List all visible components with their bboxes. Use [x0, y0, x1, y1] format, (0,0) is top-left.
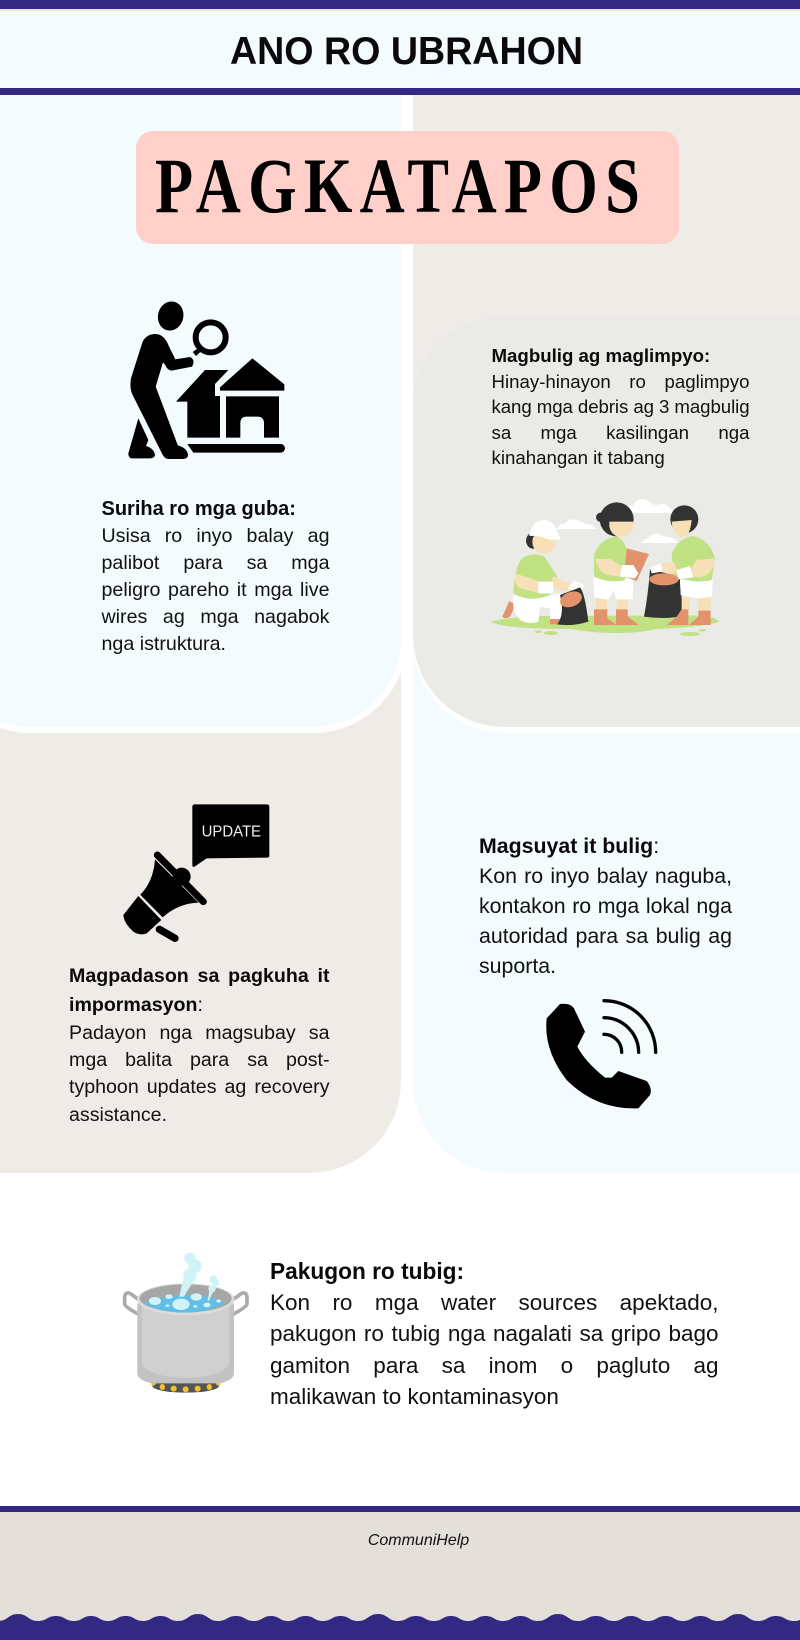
text: pakugon ro tubig: malikawan to kontaminasyon: [270, 1384, 559, 1409]
kneeling volunteer: [502, 520, 585, 624]
garbage bag left: [557, 587, 588, 625]
middle volunteer: [593, 502, 649, 625]
garbage bag right: [644, 569, 687, 618]
text: suriha ro mga guba: Suriha ro mga guba:: [102, 498, 296, 520]
text: magpadason sa pagkuha it impormasyon: typhoon updates ag recovery: [69, 1076, 330, 1098]
panel: right inner card: [413, 317, 800, 727]
text: pakugon ro tubig: Pakugon ro tubig:: [270, 1258, 464, 1284]
heading pill: pagkatapos: [136, 131, 679, 244]
text: magsuyat it bulig: suporta.: [479, 954, 556, 978]
rim and water: [137, 1283, 234, 1315]
icon: boiling pot on burner: [122, 1252, 249, 1393]
text: magpadason sa pagkuha it impormasyon: [69, 965, 330, 1126]
text: pakugon ro tubig: gamiton para sa inom o pagluto ag: [270, 1353, 718, 1378]
ground: [491, 615, 719, 636]
footer wave: [0, 1614, 800, 1640]
text: magbulig ag maglimpyo: kang mga debris ag 3 magbulig: [492, 396, 750, 417]
text: magbulig ag maglimpyo: sa mga kasilingan nga: [492, 422, 750, 443]
icon: megaphone with update bubble: [123, 804, 270, 942]
text: magsuyat it bulig: kontakon ro mga lokal nga: [479, 894, 732, 918]
text: magbulig ag maglimpyo: Magbulig ag maglimpyo:: [492, 345, 710, 366]
text: suriha ro mga guba: Usisa ro inyo balay ag: [102, 525, 330, 547]
bubbles and steam: [149, 1253, 221, 1310]
panel: right column upper background: [413, 95, 800, 735]
panel: right column lower background: [413, 640, 800, 1173]
text: pakugon ro tubig: Kon ro mga water sources apektado,: [270, 1290, 718, 1315]
panel: footer: [0, 1506, 800, 1640]
title: ano ro ubrahon: ANO RO UBRAHON: [230, 30, 583, 73]
text: magsuyat it bulig: autoridad para sa bulig ag: [479, 924, 732, 948]
panel: left column upper: [0, 60, 407, 733]
text: pakugon ro tubig: [270, 1258, 718, 1409]
pot body: [137, 1303, 234, 1383]
text: magpadason sa pagkuha it impormasyon: mga balita para sa post-: [69, 1049, 330, 1071]
top navy strip: [0, 0, 800, 9]
text: magsuyat it bulig: Kon ro inyo balay naguba,: [479, 864, 732, 888]
right volunteer: [650, 505, 715, 625]
text: suriha ro mga guba: wires ag mga nagabok: [102, 606, 330, 628]
clouds: [557, 499, 678, 543]
text: magsuyat it bulig: [479, 834, 732, 978]
speech bubble: UPDATE: [202, 824, 261, 841]
text: pakugon ro tubig: pakugon ro tubig nga nagalati sa gripo bago: [270, 1321, 718, 1346]
text: suriha ro mga guba: palibot para sa mga: [102, 552, 330, 574]
footer text: communihelp: CommuniHelp: [368, 1532, 469, 1549]
text: suriha ro mga guba: peligro pareho it mga live: [102, 579, 330, 601]
panel: left column lower background: [0, 640, 401, 1173]
text: magbulig ag maglimpyo: kinahangan it tabang: [492, 447, 665, 468]
handles: [125, 1293, 247, 1315]
icon: phone with signal arcs: [546, 999, 658, 1108]
text: suriha ro mga guba: [102, 498, 330, 655]
burner: [151, 1379, 221, 1393]
speech bubble: [192, 804, 269, 867]
panel: header band: [0, 9, 800, 95]
text: magbulig ag maglimpyo: Hinay-hinayon ro paglimpyo: [492, 371, 750, 392]
text: magpadason sa pagkuha it impormasyon: Padayon nga magsubay sa: [69, 1022, 330, 1044]
text: magbulig ag maglimpyo: [492, 345, 750, 468]
text: magsuyat it bulig: Magsuyat it bulig:: [479, 834, 659, 858]
heading text: PAGKATAPOS: [155, 144, 640, 230]
icon: person inspecting house: [128, 302, 285, 459]
illustration: volunteers cleaning up: [490, 499, 719, 636]
text: magpadason sa pagkuha it impormasyon: assistance.: [69, 1104, 167, 1126]
text: magpadason sa pagkuha it impormasyon: impormasyon:: [69, 994, 203, 1016]
megaphone: [123, 855, 203, 938]
text: magpadason sa pagkuha it impormasyon: Magpadason sa pagkuha it: [69, 965, 330, 987]
text: suriha ro mga guba: nga istruktura.: [102, 633, 226, 655]
